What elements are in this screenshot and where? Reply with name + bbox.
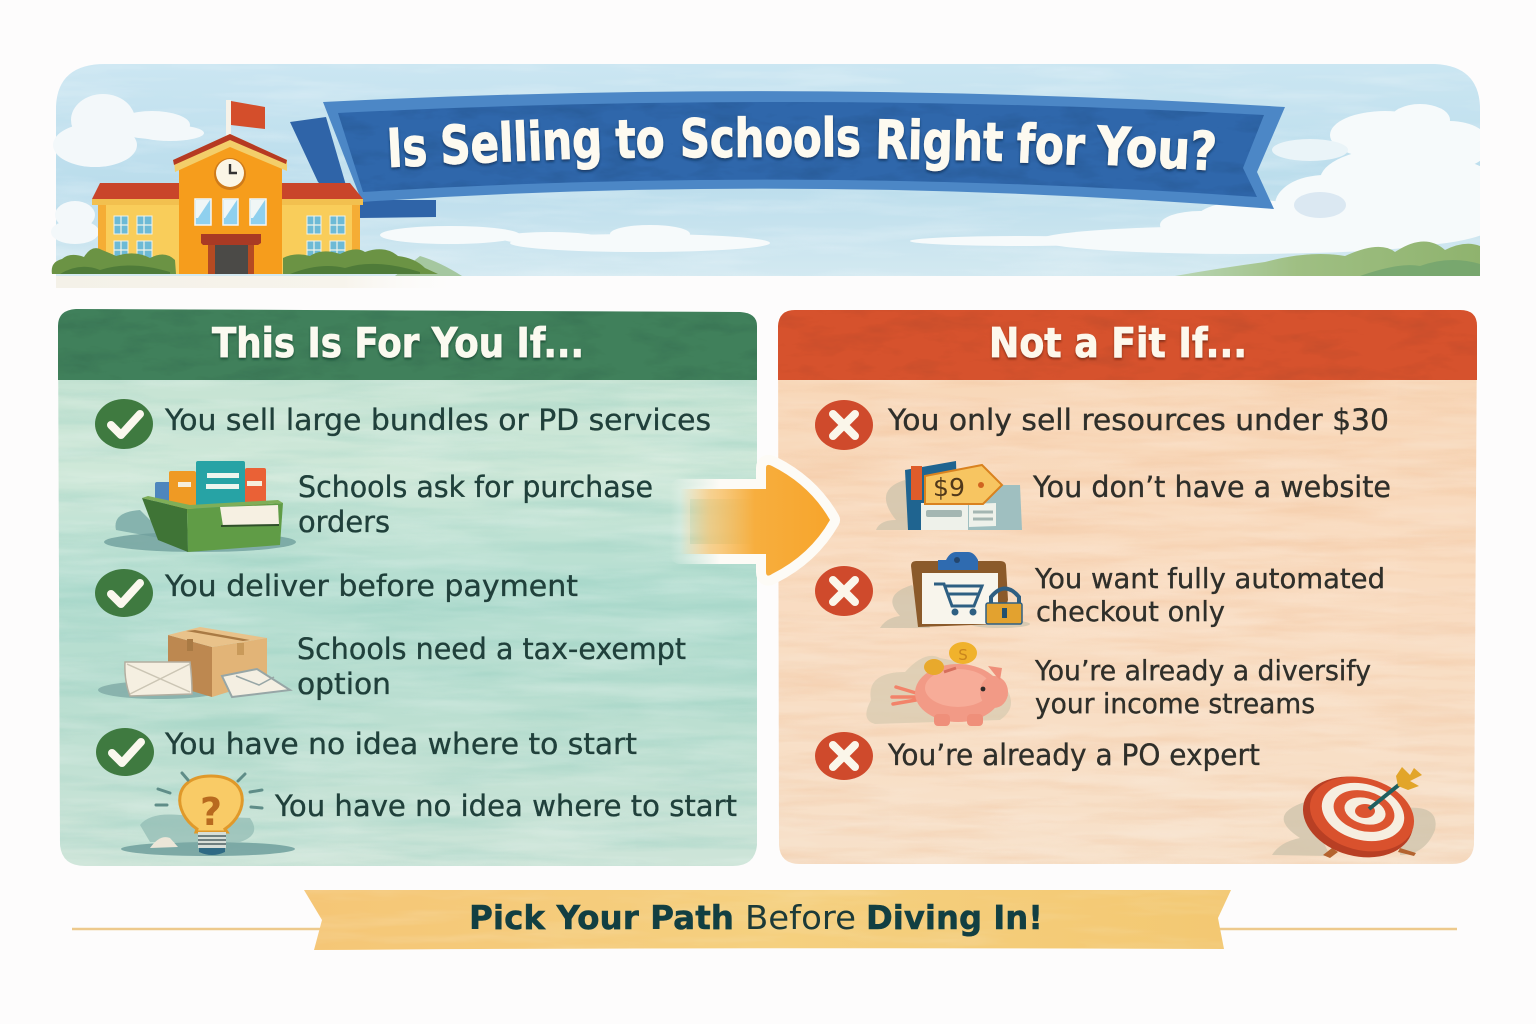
text: not-fit 3: You want fully automated (1034, 562, 1385, 595)
icon: box and envelopes (98, 627, 290, 699)
text: not-fit 1: You only sell resources under $30 (887, 403, 1389, 437)
heading bar (776, 308, 1480, 380)
icon: question light bulb: ? (200, 790, 222, 834)
icon: school building (52, 100, 438, 274)
text: not-fit 4: You’re already a diversify (1034, 654, 1371, 687)
icon: price tag and books: $9 (933, 473, 965, 502)
check 2 (95, 569, 153, 617)
text: item 6: You have no idea where to start (274, 789, 737, 823)
panel: this is for you: option (297, 667, 391, 701)
panel: this is for you: orders (298, 505, 390, 539)
icon: target with dart (1272, 765, 1436, 869)
distant hills (1175, 241, 1480, 276)
footer text: Diving In! (866, 898, 1043, 937)
text: item 2: Schools ask for purchase (298, 470, 653, 504)
text: item 4: Schools need a tax-exempt (297, 632, 686, 666)
title ribbon (290, 85, 1285, 218)
heading bar (56, 308, 760, 380)
icon: price tag and books (876, 461, 1022, 530)
text: item 5: You have no idea where to start (164, 727, 637, 761)
text: not-fit 2: You don’t have a website (1032, 470, 1391, 504)
text: item 3: You deliver before payment (164, 569, 578, 603)
icon: question light bulb (121, 773, 295, 856)
x mark 1 (815, 400, 873, 450)
footer text (469, 898, 1043, 937)
x mark 3 (815, 732, 873, 780)
title: Is (385, 117, 429, 180)
panel: not a fit (776, 308, 1480, 869)
heading bar: This Is For You If... (212, 319, 584, 367)
flag (226, 100, 265, 136)
ground strip (56, 276, 466, 288)
left clouds over the edge (51, 94, 204, 244)
footer ribbon (72, 888, 1457, 952)
title: Selling (439, 109, 603, 177)
panel: this is for you (56, 308, 760, 868)
bushes (52, 248, 438, 274)
text: not-fit 5: You’re already a PO expert (887, 738, 1260, 772)
check 3 (96, 728, 154, 776)
title: Right (875, 110, 1004, 174)
title: for (1015, 114, 1086, 178)
footer text: Before (745, 898, 856, 937)
x mark 2 (815, 566, 873, 616)
footer text: Pick Your Path (469, 898, 734, 937)
text: item 1: You sell large bundles or PD services (164, 403, 711, 437)
title: You? (1094, 116, 1218, 183)
icon: bin of books (104, 461, 296, 552)
panel: not a fit: your income streams (1035, 687, 1315, 720)
header banner scene (51, 64, 1500, 288)
clouds (380, 104, 1500, 254)
icon: piggy bank: S (958, 646, 968, 664)
icon: cart clipboard and lock (880, 552, 1030, 628)
title (385, 108, 1218, 183)
icon: piggy bank (866, 642, 1011, 726)
heading bar: Not a Fit If... (989, 319, 1247, 367)
arrow between panels (680, 465, 830, 576)
panel: not a fit: checkout only (1036, 595, 1225, 628)
title: Schools (680, 108, 861, 170)
check 1 (95, 399, 153, 449)
title: to (615, 109, 665, 171)
